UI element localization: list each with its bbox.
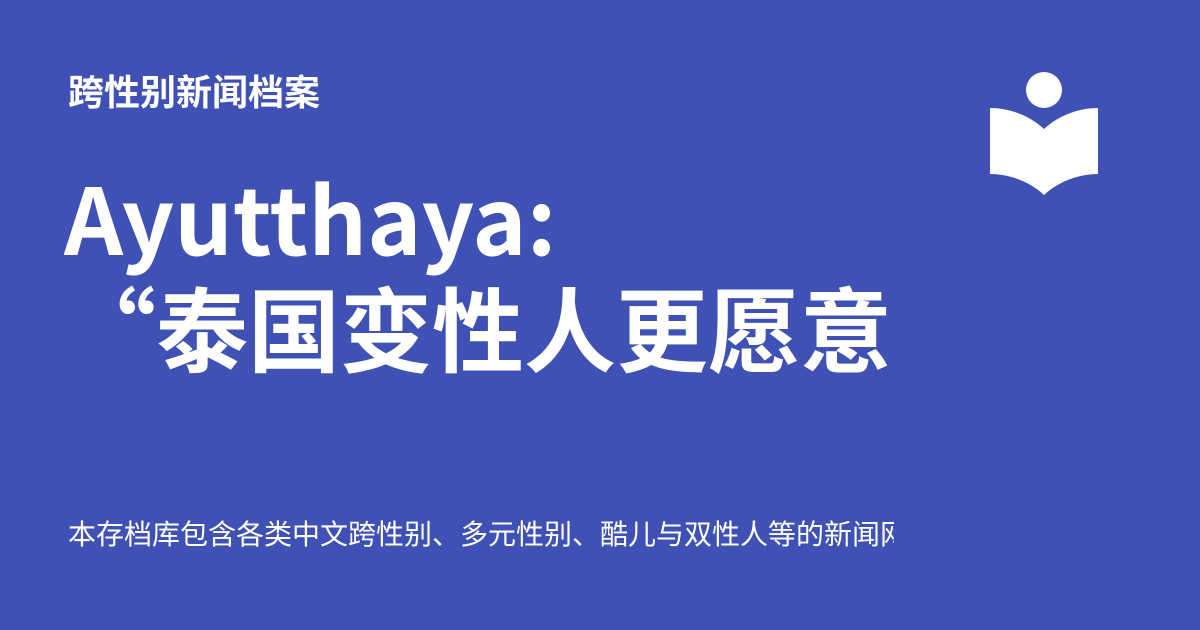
icon: person reading book [990,72,1098,195]
site name heading: 跨性别新闻档案 [68,64,320,116]
title [64,161,892,386]
